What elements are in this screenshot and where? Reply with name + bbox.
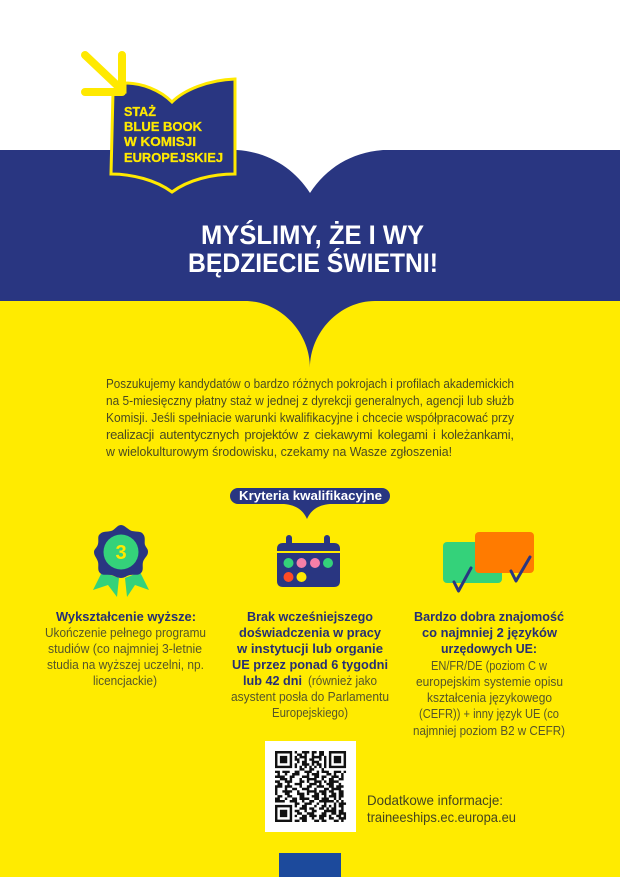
criterion: languages: (CEFR)) + inny język UE (co (419, 707, 559, 721)
criterion: experience: doświadczenia w pracy (239, 626, 381, 640)
criterion: languages: Bardzo dobra znajomość (414, 610, 564, 624)
calendar body (277, 553, 340, 587)
criterion: languages: kształcenia językowego (427, 691, 552, 705)
more information text (367, 792, 516, 825)
criterion: education: studiów (co najmniej 3-letnie (48, 642, 202, 656)
green box (443, 542, 502, 583)
criterion: experience (231, 610, 389, 720)
criterion: languages: EN/FR/DE (poziom C w (431, 659, 548, 673)
criterion: education: licencjackie) (93, 674, 157, 688)
intro paragraph: w wielokulturowym środowisku, czekamy na Wasze zgłoszenia! (105, 444, 452, 459)
badge title (124, 104, 223, 165)
calendar header (277, 543, 340, 551)
intro paragraph: Poszukujemy kandydatów o bardzo różnych pokrojach i profilach akademickich (106, 376, 514, 391)
criterion: experience: UE przez ponad 6 tygodni (232, 658, 388, 672)
icon: speech boxes with ticks (443, 532, 534, 591)
more information text: Dodatkowe informacje: (367, 792, 503, 808)
criterion: languages: co najmniej 2 języków (422, 626, 557, 640)
blue open-book band (0, 150, 620, 368)
criteria label pill (230, 488, 390, 519)
badge title: W KOMISJI (124, 135, 196, 149)
intro paragraph: Komisji. Jeśli spełniacie warunki kwalifikacyjne i chcecie współpracować przy (106, 410, 514, 425)
criterion: languages: najmniej poziom B2 w CEFR) (413, 724, 565, 738)
orange box (475, 532, 534, 573)
main heading (188, 219, 438, 278)
criterion: experience: Brak wcześniejszego (247, 610, 373, 624)
green disc (104, 534, 138, 570)
criterion: education: Ukończenie pełnego programu (45, 626, 206, 640)
badge title: EUROPEJSKIEJ (124, 151, 223, 165)
tick one (454, 568, 471, 591)
white top background (0, 0, 620, 150)
yellow lower background (0, 300, 620, 877)
book shape (111, 79, 235, 192)
more information text: traineeships.ec.europa.eu (367, 809, 516, 825)
QR code (265, 741, 356, 832)
icon: rosette with number 3 (93, 525, 149, 597)
criterion: languages (413, 610, 565, 738)
criterion: experience: w instytucji lub organie (236, 642, 383, 656)
calendar tabs (289, 538, 327, 548)
pill with pointer (230, 488, 390, 519)
yellow arrow (85, 55, 122, 92)
pill text: Kryteria kwalifikacyjne (239, 488, 382, 503)
criterion: education (45, 610, 206, 688)
criterion: experience: Europejskiego) (272, 706, 348, 720)
QR white panel (265, 741, 356, 832)
QR modules (275, 751, 346, 822)
main heading: MYŚLIMY, ŻE I WY (201, 219, 424, 250)
logo badge: book with arrow (85, 55, 235, 192)
ribbon right (125, 572, 149, 597)
intro paragraph: na 5-miesięczny płatny staż w jednej z dyrekcji generalnych, agencji lub służb (106, 393, 514, 408)
badge title: STAŻ (124, 104, 156, 119)
blue footer tab (279, 853, 341, 877)
scalloped badge (94, 525, 148, 578)
criterion: experience: (również jako (308, 674, 377, 688)
ribbon left (93, 572, 119, 597)
criterion: languages: urzędowych UE: (441, 642, 537, 656)
icon: calendar (277, 538, 340, 587)
tick two (511, 557, 530, 581)
criterion: experience: asystent posła do Parlamentu (231, 690, 389, 704)
criterion: languages: europejskim systemie opisu (416, 675, 563, 689)
criterion: education: Wykształcenie wyższe: (56, 610, 196, 624)
intro paragraph (105, 376, 514, 459)
calendar dots (284, 558, 333, 582)
criterion: education: studia na wyższej uczelni, np. (47, 658, 204, 672)
main heading: BĘDZIECIE ŚWIETNI! (188, 247, 438, 278)
criterion: experience: lub 42 dni (243, 674, 302, 688)
badge title: BLUE BOOK (124, 120, 202, 134)
number: 3 (115, 542, 127, 564)
intro paragraph: realizacji autentycznych projektów z ciekawymi kolegami i koleżankami, (106, 427, 514, 442)
